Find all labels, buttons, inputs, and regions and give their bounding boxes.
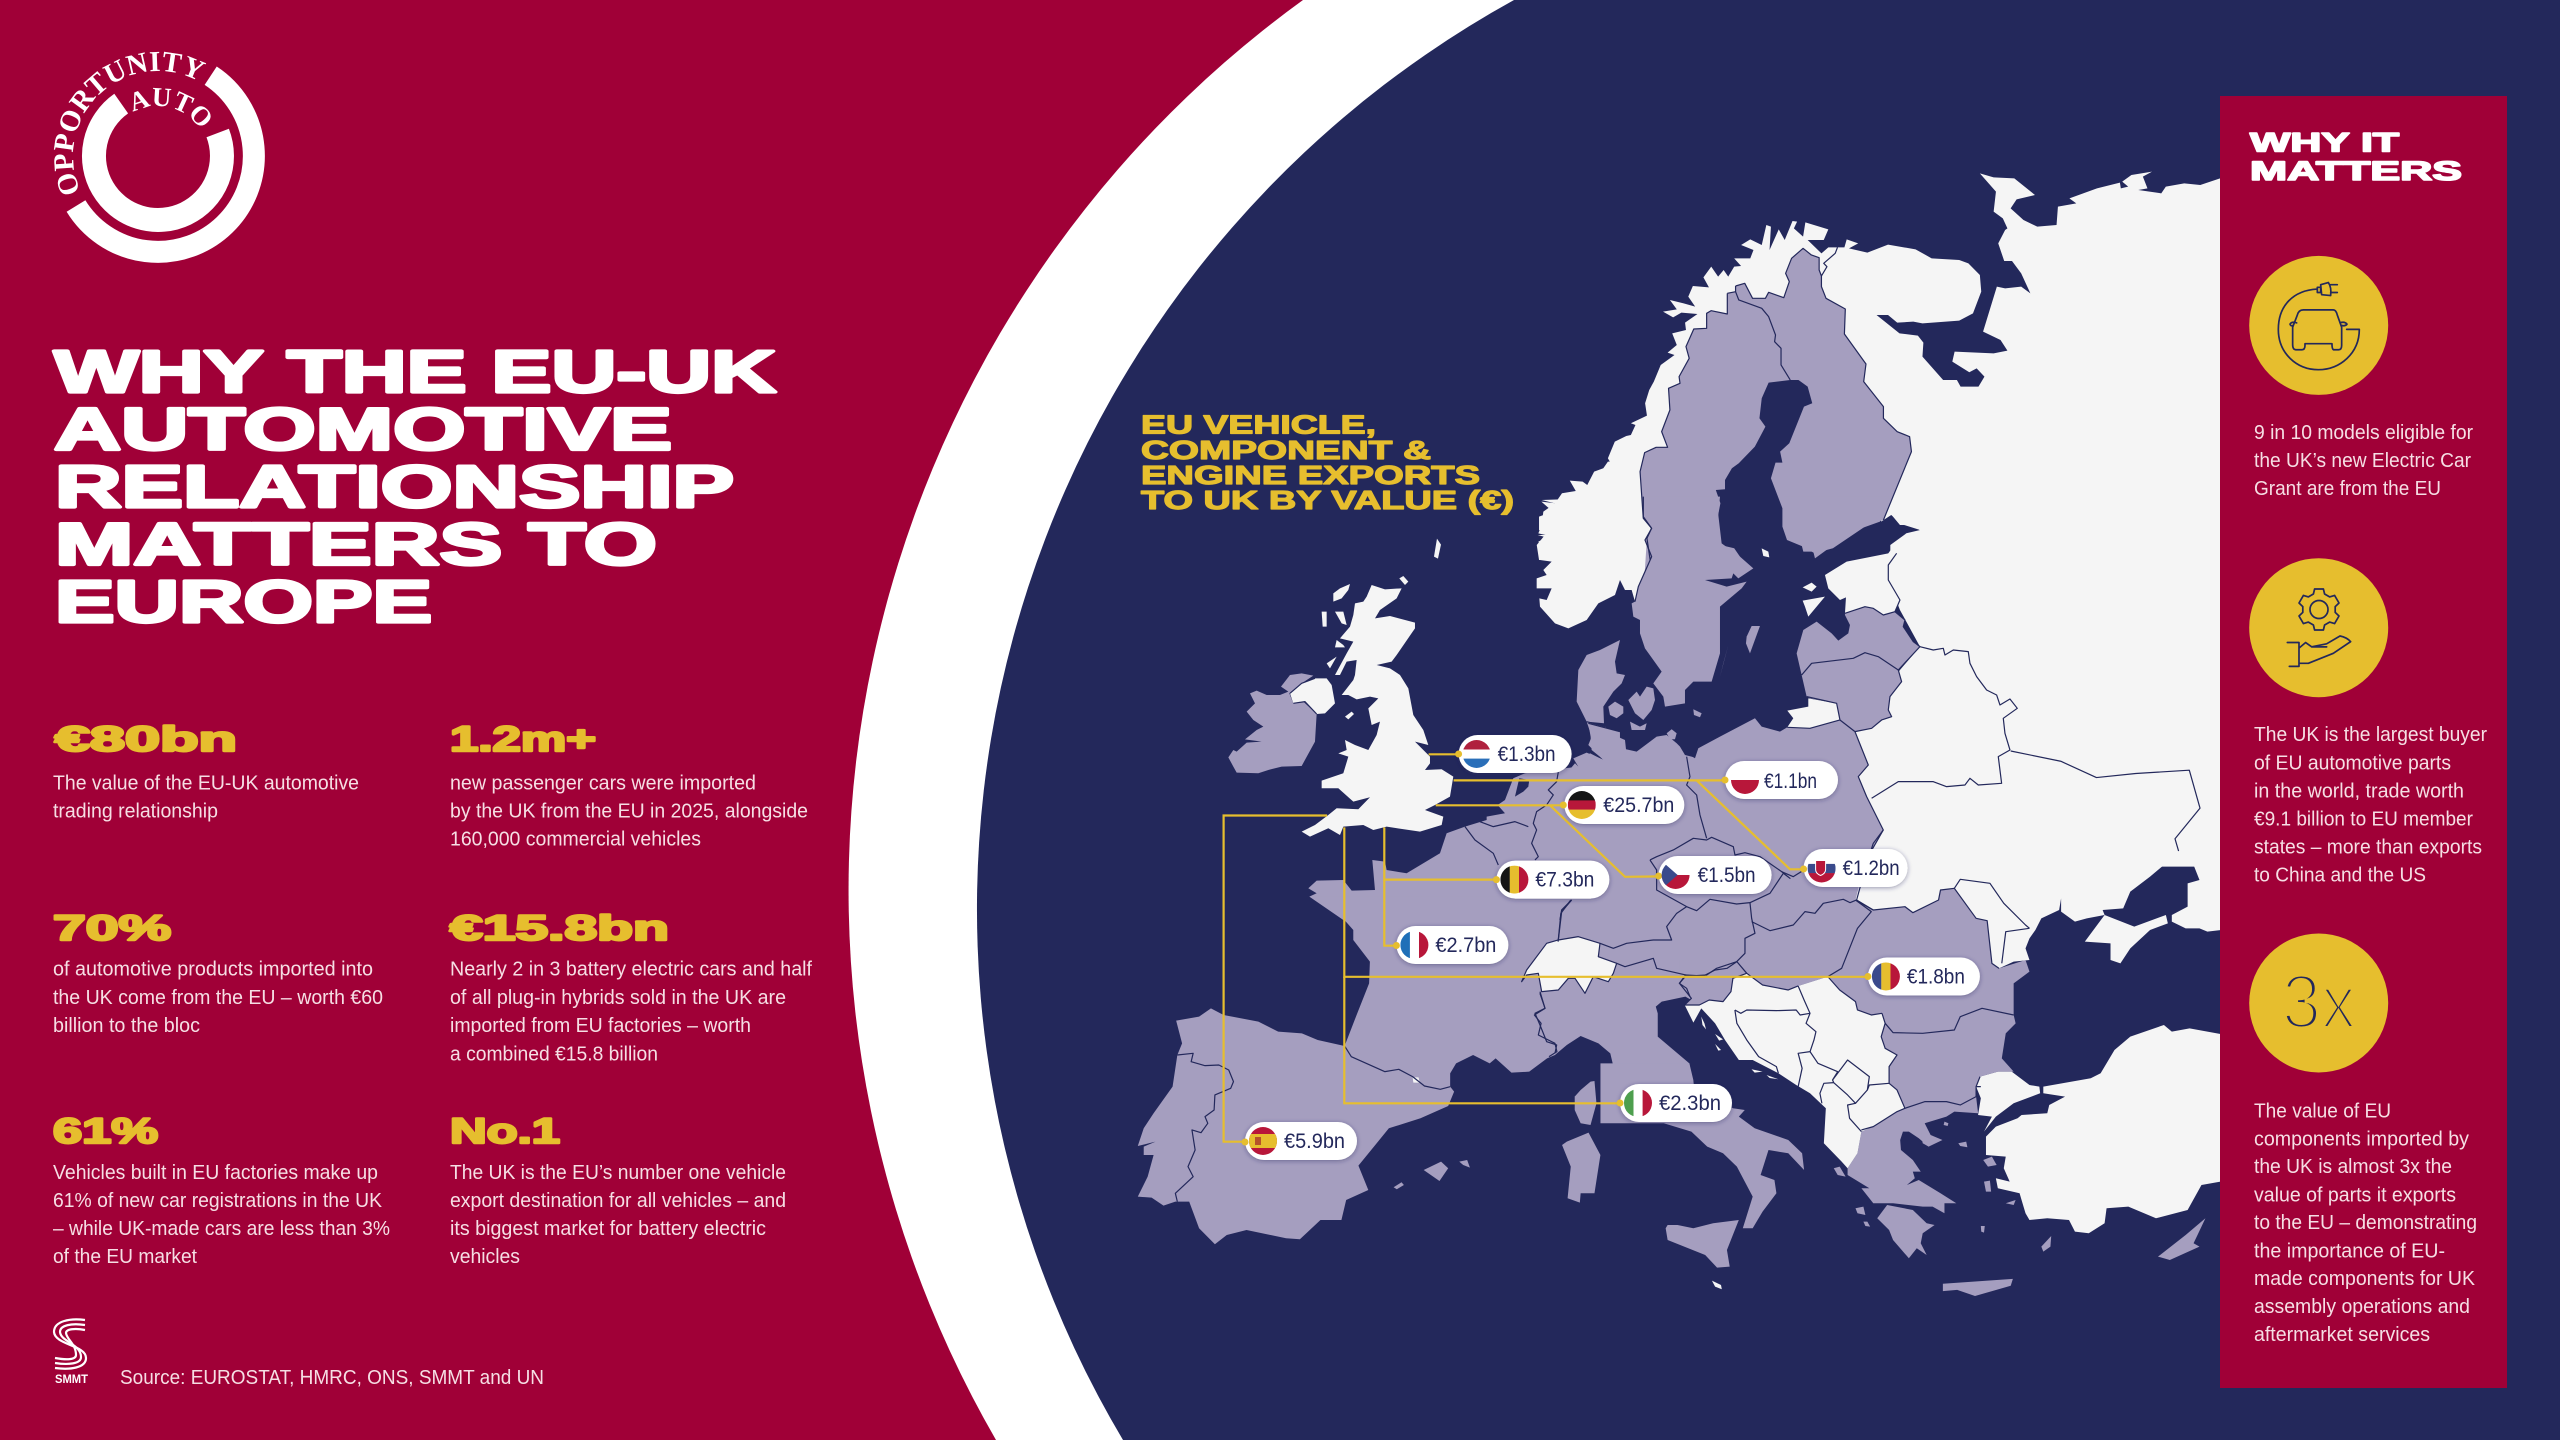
stat: €80bn: [53, 720, 359, 823]
EU land: Ireland, Benelux, northern France: [1228, 673, 1620, 920]
logo: Opportunity Auto: OPPORTUNITY: [54, 52, 206, 194]
map heading: EU VEHICLE,: [1141, 410, 1376, 440]
text: largest buyer: of EU automotive parts: [2254, 752, 2451, 774]
icon: electric car: [2249, 256, 2388, 395]
title: EUROPE: [55, 569, 432, 635]
title: MATTERS TO: [55, 512, 657, 578]
non-EU land: Norway, Kola and Russia: [1537, 172, 2253, 560]
navy map background: [977, 0, 2560, 1440]
stat: €80bn: The value of the EU-UK automotive: [53, 772, 359, 794]
title: RELATIONSHIP: [55, 454, 734, 520]
logo: Opportunity Auto: [54, 52, 265, 263]
stat: 61%: – while UK-made cars are less than 3%: [53, 1217, 390, 1240]
pill: Romania €1.8bn: [1864, 958, 1980, 996]
stat: 61%: 61% of new car registrations in the UK: [53, 1189, 382, 1212]
text: largest buyer: in the world, trade worth: [2254, 780, 2464, 803]
title: WHY THE EU-UK: [54, 339, 777, 405]
stat: 1.2m+: [450, 720, 808, 850]
EU land: Sweden and Finland north: [1640, 248, 1911, 573]
title: [54, 339, 777, 635]
stat: No.1: export destination for all vehicles – and: [450, 1189, 786, 1212]
logo: SMMT: SMMT: [55, 1374, 88, 1386]
pill: Slovakia €1.2bn: €1.2bn: [1843, 857, 1900, 880]
icon: 3x: 3x: [2282, 960, 2356, 1045]
pill: Czechia €1.5bn: €1.5bn: [1698, 864, 1756, 887]
stat: 70%: [53, 909, 383, 1037]
stat: 61%: [53, 1112, 390, 1268]
icon: gear in hand: [2249, 558, 2388, 697]
stat: 61%: Vehicles built in EU factories make up: [53, 1161, 378, 1184]
logo: Opportunity Auto: AUTO: [132, 88, 211, 126]
stat: 1.2m+: 160,000 commercial vehicles: [450, 828, 701, 850]
stat: €15.8bn: imported from EU factories – worth: [450, 1014, 751, 1037]
map heading: ENGINE EXPORTS: [1141, 460, 1480, 490]
pill: Belgium €7.3bn: [1493, 861, 1609, 899]
text: component value: [2254, 1099, 2477, 1346]
non-EU land: Ukraine, Crimea, Turkey: [1854, 827, 2241, 1233]
map heading: [1141, 410, 1514, 515]
panel: why it matters: [2220, 96, 2507, 1388]
logo: SMMT: [54, 1319, 88, 1386]
text: largest buyer: states – more than exports: [2254, 836, 2482, 859]
stat: No.1: its biggest market for battery electric: [450, 1217, 766, 1240]
EU land: France, Iberia, northern Italy and islands: [1138, 897, 1740, 1268]
pill: Italy €2.3bn: €2.3bn: [1659, 1092, 1721, 1115]
stat: €15.8bn: a combined €15.8 billion: [450, 1042, 658, 1065]
pill: Spain €5.9bn: €5.9bn: [1284, 1130, 1345, 1153]
stat: 1.2m+: new passenger cars were imported: [450, 772, 756, 794]
stat: 70%: the UK come from the EU – worth €60: [53, 986, 383, 1009]
country borders: [1175, 247, 2200, 1202]
pill: Italy €2.3bn: [1616, 1084, 1732, 1122]
text: largest buyer: €9.1 billion to EU member: [2254, 807, 2473, 830]
stat: €15.8bn: [450, 909, 812, 1065]
pill: Netherlands €1.3bn: €1.3bn: [1498, 743, 1556, 766]
pill: Poland €1.1bn: €1.1bn: [1764, 770, 1817, 793]
text: component value: value of parts it exports: [2254, 1183, 2456, 1206]
text: component value: the importance of EU-: [2254, 1239, 2445, 1262]
inland water: [1515, 747, 1694, 797]
panel heading: [2250, 128, 2462, 186]
stat: No.1: No.1: [450, 1112, 560, 1151]
stat: 70%: 70%: [53, 909, 171, 948]
text: largest buyer: The UK is the largest buyer: [2254, 723, 2487, 746]
stat: €80bn: trading relationship: [53, 800, 218, 823]
text: component value: components imported by: [2254, 1128, 2470, 1150]
non-EU land on top: Switzerland, Balkans, Kaliningrad, Northern Ireland: [1290, 678, 1905, 1289]
pill: Slovakia €1.2bn: [1800, 849, 1908, 887]
pill: Germany €25.7bn: €25.7bn: [1603, 794, 1674, 817]
stat: No.1: vehicles: [450, 1245, 520, 1268]
text: electric car grant: the UK’s new Electric Car: [2254, 449, 2471, 472]
pill: Germany €25.7bn: [1560, 786, 1684, 824]
stat: 70%: of automotive products imported into: [53, 958, 373, 981]
text: component value: made components for UK: [2254, 1267, 2475, 1290]
stat: 70%: billion to the bloc: [53, 1014, 200, 1037]
text: electric car grant: 9 in 10 models eligible for: [2254, 421, 2473, 444]
pill: Netherlands €1.3bn: [1455, 735, 1572, 773]
stat: €80bn: €80bn: [55, 720, 237, 759]
pill: Czechia €1.5bn: [1655, 856, 1772, 894]
non-EU land: southern Norway, Estonia, Belarus: [1537, 497, 2233, 867]
pill: Poland €1.1bn: [1722, 761, 1838, 799]
stat: €15.8bn: €15.8bn: [450, 909, 669, 948]
text: component value: The value of EU: [2254, 1099, 2391, 1122]
map of Europe: [1138, 172, 2253, 1296]
icon: 3x: [2249, 934, 2388, 1072]
EU land: south Sweden, Denmark, Baltics, Poland, north Germany: [1567, 497, 1920, 900]
stat: No.1: The UK is the EU’s number one vehicle: [450, 1161, 786, 1184]
text: component value: assembly operations and: [2254, 1295, 2470, 1318]
text: component value: aftermarket services: [2254, 1323, 2430, 1346]
panel heading: MATTERS: [2250, 156, 2462, 186]
text: electric car grant: [2254, 421, 2473, 500]
pill: France €2.7bn: €2.7bn: [1435, 934, 1496, 957]
connector lines: [1224, 754, 1868, 1142]
pill: Spain €5.9bn: [1242, 1122, 1357, 1160]
stat: 61%: 61%: [53, 1112, 158, 1151]
text: electric car grant: Grant are from the EU: [2254, 477, 2441, 500]
stat: 61%: of the EU market: [53, 1245, 197, 1268]
stat: 1.2m+: by the UK from the EU in 2025, alongside: [450, 800, 808, 823]
panel heading: WHY IT: [2250, 128, 2400, 158]
EU land: Crete: [1943, 1279, 2013, 1296]
pill: France €2.7bn: [1393, 926, 1508, 964]
pill: Romania €1.8bn: €1.8bn: [1907, 966, 1965, 988]
Great Britain and islands: [1302, 539, 1453, 837]
text: component value: the UK is almost 3x the: [2254, 1155, 2452, 1178]
map heading: TO UK BY VALUE (€): [1141, 485, 1514, 515]
stat: No.1: [450, 1112, 786, 1268]
map heading: COMPONENT &: [1141, 435, 1431, 465]
pill: Belgium €7.3bn: €7.3bn: [1535, 869, 1594, 892]
EU land: central Europe, Romania, Bulgaria, Greece, southern Italy: [1600, 843, 2205, 1260]
white arc band: [849, 0, 2560, 1440]
text: largest buyer: to China and the US: [2254, 863, 2426, 886]
source note: Source: EUROSTAT, HMRC, ONS, SMMT and UN: [120, 1366, 544, 1389]
text: component value: to the EU – demonstrating: [2254, 1211, 2477, 1234]
stat: 1.2m+: 1.2m+: [450, 720, 596, 759]
title: AUTOMOTIVE: [54, 396, 672, 462]
stat: €15.8bn: Nearly 2 in 3 battery electric cars and half: [450, 958, 812, 981]
text: largest buyer: [2254, 723, 2487, 886]
stat: €15.8bn: of all plug-in hybrids sold in the UK are: [450, 986, 786, 1009]
